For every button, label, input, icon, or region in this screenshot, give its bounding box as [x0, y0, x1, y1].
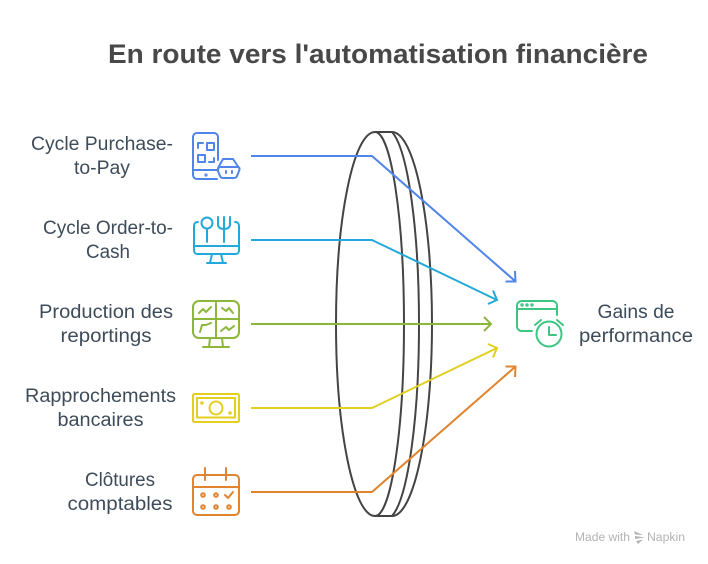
lens shape: [336, 132, 432, 516]
icon: phone with QR code and basket: [193, 133, 240, 179]
label: cycle purchase-to-pay: Cycle Purchase-: [31, 134, 173, 155]
icon: monitor with four charts: [193, 301, 239, 347]
label: rapprochements bancaires: bancaires: [58, 410, 144, 431]
arrow: reportings: [251, 317, 491, 331]
label: rapprochements bancaires: Rapprochements: [25, 386, 176, 407]
label: gains de performance: Gains de: [598, 302, 674, 323]
label: cycle purchase-to-pay: to-Pay: [74, 158, 131, 179]
label: clôtures comptables: [68, 470, 172, 515]
watermark: Napkin: [647, 532, 685, 544]
label: clôtures comptables: Clôtures: [85, 470, 155, 491]
arrow: rapprochements: [251, 344, 497, 408]
label: rapprochements bancaires: [25, 386, 176, 431]
icon: calendar with check: [193, 468, 239, 515]
label: cycle purchase-to-pay: [31, 134, 173, 179]
label: cycle order-to-cash: Cycle Order-to-: [43, 218, 173, 239]
watermark: Made with: [575, 532, 630, 544]
watermark: [575, 531, 685, 544]
arrow: order-to-cash: [251, 240, 497, 304]
icon: browser window with alarm clock: [517, 301, 563, 346]
arrow: purchase-to-pay: [251, 156, 516, 282]
icon: monitor with spoon and fork: [194, 217, 239, 263]
label: production des reportings: [39, 302, 173, 347]
label: production des reportings: Production des: [39, 302, 173, 323]
icon: napkin logo: [634, 531, 645, 544]
label: gains de performance: [579, 302, 693, 347]
label: cycle order-to-cash: Cash: [86, 242, 130, 263]
label: cycle order-to-cash: [43, 218, 173, 263]
title: En route vers l'automatisation financière: [108, 39, 648, 69]
label: clôtures comptables: comptables: [68, 494, 172, 515]
label: gains de performance: performance: [579, 326, 693, 347]
arrow: clôtures: [251, 366, 516, 492]
icon: banknote: [193, 394, 239, 422]
label: production des reportings: reportings: [60, 326, 152, 347]
